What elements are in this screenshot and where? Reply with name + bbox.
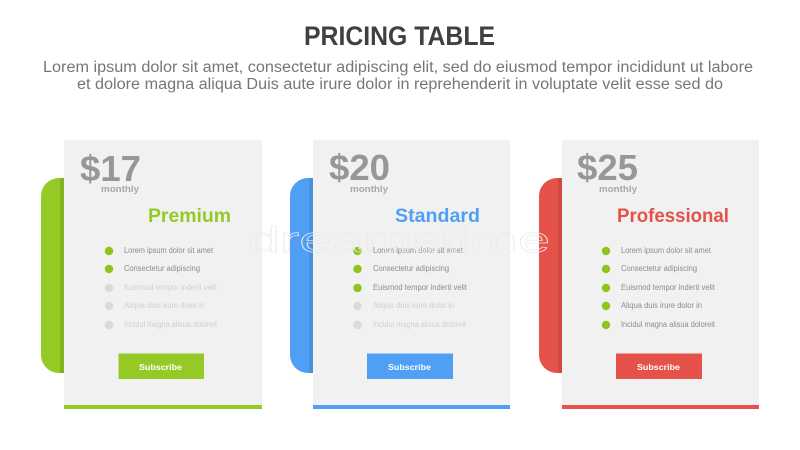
price: $20: $20 bbox=[329, 147, 390, 188]
feature list: standard: Lorem ipsum dolor sit amet bbox=[373, 246, 464, 255]
feature list: standard: Euismod tempor inderit velit bbox=[373, 283, 468, 292]
feature list: premium: Lorem ipsum dolor sit amet bbox=[124, 246, 214, 255]
bottom bar: premium bbox=[64, 405, 262, 409]
feature list: premium: Consectetur adipiscing bbox=[124, 264, 200, 273]
feature list: professional: Incidul magna alisua doloreit bbox=[621, 320, 716, 329]
feature list: standard: Consectetur adipiscing bbox=[373, 264, 449, 273]
price: $17: $17 bbox=[80, 148, 141, 189]
subscribe button: professional bbox=[616, 354, 702, 379]
side tab: standard bbox=[290, 178, 313, 373]
subscribe button: professional: Subscribe bbox=[637, 363, 681, 372]
subscribe button: standard bbox=[367, 354, 453, 379]
feature list: premium: Aliqua duis irure dolor in bbox=[124, 301, 205, 310]
plan name: premium: Premium bbox=[148, 206, 231, 227]
panel: premium plan bbox=[41, 140, 262, 409]
subscribe button: standard: Subscribe bbox=[388, 363, 432, 372]
billing period: standard: monthly bbox=[350, 184, 388, 194]
feature list: premium: Euismod tempor inderit velit bbox=[124, 283, 218, 292]
billing period: professional: monthly bbox=[599, 184, 637, 194]
title: PRICING TABLE bbox=[304, 21, 495, 51]
billing period: premium: monthly bbox=[101, 184, 139, 194]
subscribe button: premium bbox=[118, 354, 204, 379]
feature list: professional: Consectetur adipiscing bbox=[621, 264, 697, 273]
side tab: premium bbox=[41, 178, 64, 373]
subtitle text bbox=[43, 59, 753, 93]
card background: premium bbox=[64, 140, 262, 405]
feature list: professional: Lorem ipsum dolor sit amet bbox=[621, 246, 712, 255]
feature list: standard: Aliqua duis irure dolor in bbox=[373, 301, 454, 310]
feature list: professional: Euismod tempor inderit velit bbox=[621, 283, 716, 292]
price: $25: $25 bbox=[577, 147, 638, 188]
subtitle text: Lorem ipsum dolor sit amet, consectetur adipiscing elit, sed do eiusmod tempor incididunt ut labore bbox=[43, 59, 753, 76]
plan name: professional: Professional bbox=[617, 206, 729, 227]
plan name: standard: Standard bbox=[395, 206, 480, 227]
bottom bar: professional bbox=[562, 405, 759, 409]
panel: professional plan bbox=[539, 140, 759, 409]
card background: standard bbox=[313, 140, 510, 405]
bottom bar: standard bbox=[313, 405, 510, 409]
feature list: premium: Incidul magna alisua doloreit bbox=[124, 320, 218, 329]
side tab: professional bbox=[539, 178, 562, 373]
subscribe button: premium: Subscribe bbox=[139, 363, 183, 372]
feature list: standard bbox=[353, 246, 468, 329]
subtitle text: et dolore magna aliqua Duis aute irure dolor in reprehenderit in voluptate velit esse sed do bbox=[77, 76, 723, 93]
panel: standard plan bbox=[290, 140, 510, 409]
feature list: premium bbox=[105, 246, 218, 329]
card background: professional bbox=[562, 140, 759, 405]
feature list: standard: Incidul magna alisua doloreit bbox=[373, 320, 467, 329]
feature list: professional bbox=[602, 246, 716, 329]
watermark: dreamstime bbox=[248, 219, 550, 260]
feature list: professional: Aliqua duis irure dolor in bbox=[621, 301, 702, 310]
